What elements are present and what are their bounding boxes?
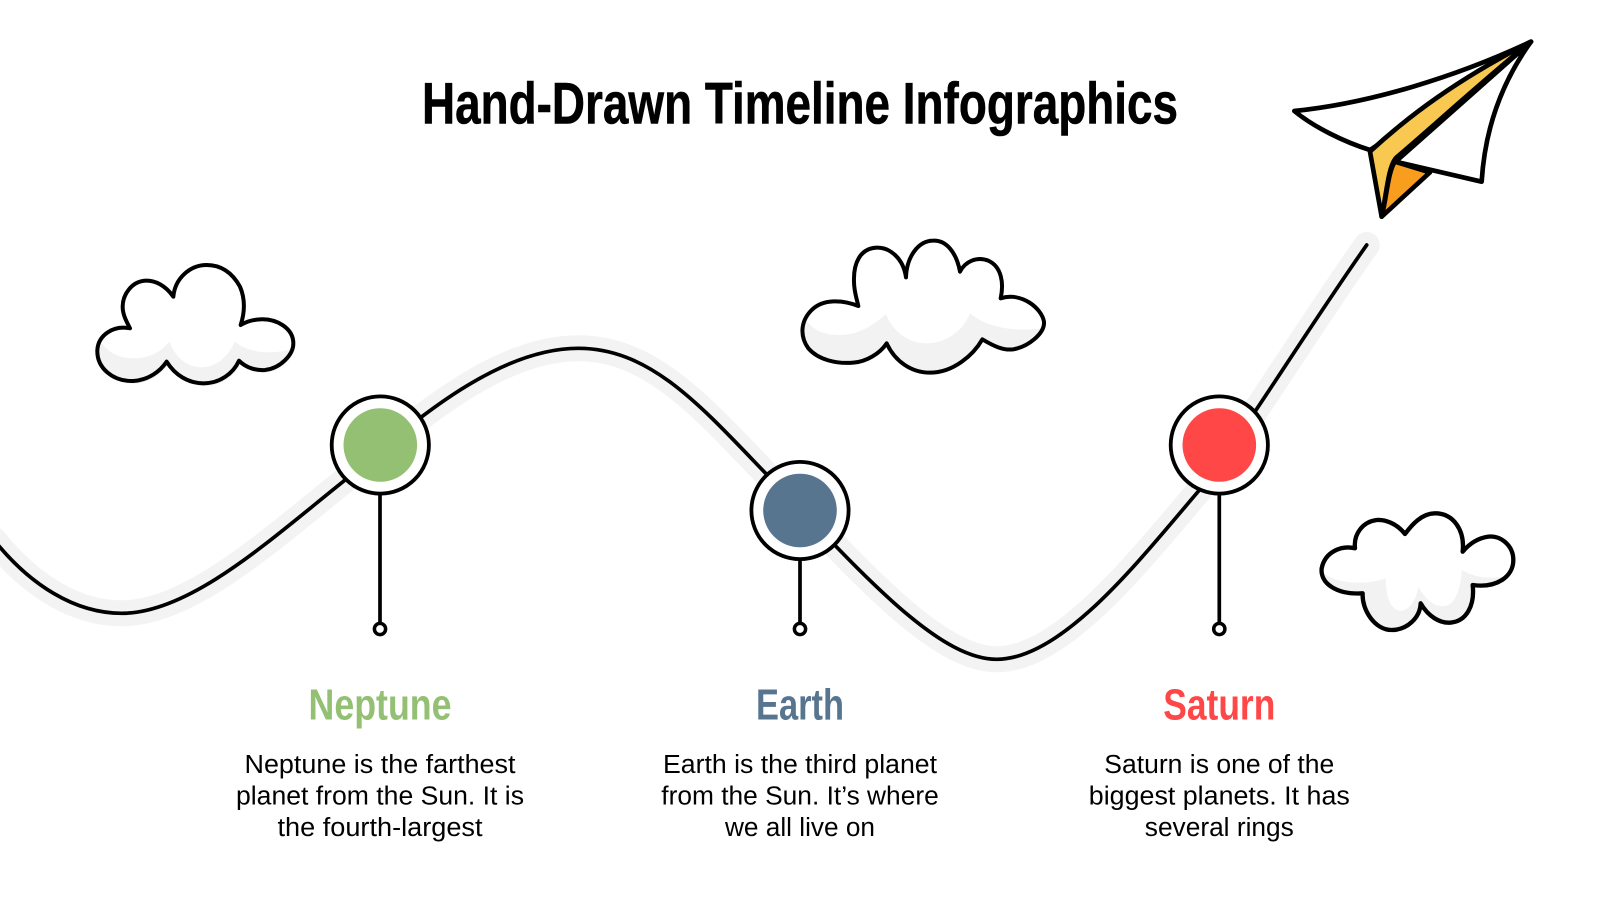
timeline curve [0, 245, 1367, 659]
description: Neptune: Neptune is the farthest [244, 751, 516, 779]
description: Neptune: the fourth-largest [278, 814, 482, 842]
description: Earth: Earth is the third planet [663, 751, 937, 779]
heading: Earth: Earth [756, 682, 844, 730]
heading: Saturn: Saturn [1163, 682, 1275, 730]
description: Saturn: several rings [1145, 814, 1294, 842]
heading: Neptune: Neptune [308, 682, 452, 730]
cloud: top left [90, 250, 300, 386]
text block: Earth [661, 682, 939, 842]
description: Neptune: planet from the Sun. It is [236, 782, 524, 810]
cloud: top centre [793, 233, 1050, 374]
cloud: bottom right [1313, 503, 1520, 632]
description: Saturn: Saturn is one of the [1104, 751, 1334, 779]
description: Earth: we all live on [724, 814, 875, 842]
description: Earth [661, 751, 939, 842]
text block: Saturn [1089, 682, 1350, 842]
text block: Neptune [236, 682, 524, 842]
description: Earth: from the Sun. It’s where [661, 782, 939, 810]
marker: Saturn [1171, 396, 1268, 635]
description: Neptune [236, 751, 524, 842]
description: Saturn: biggest planets. It has [1089, 782, 1350, 810]
marker: Neptune [332, 396, 429, 635]
title: Hand-Drawn Timeline Infographics [422, 72, 1178, 136]
icon: paper plane [1294, 42, 1531, 217]
description: Saturn [1089, 751, 1350, 842]
marker: Earth [751, 462, 849, 635]
